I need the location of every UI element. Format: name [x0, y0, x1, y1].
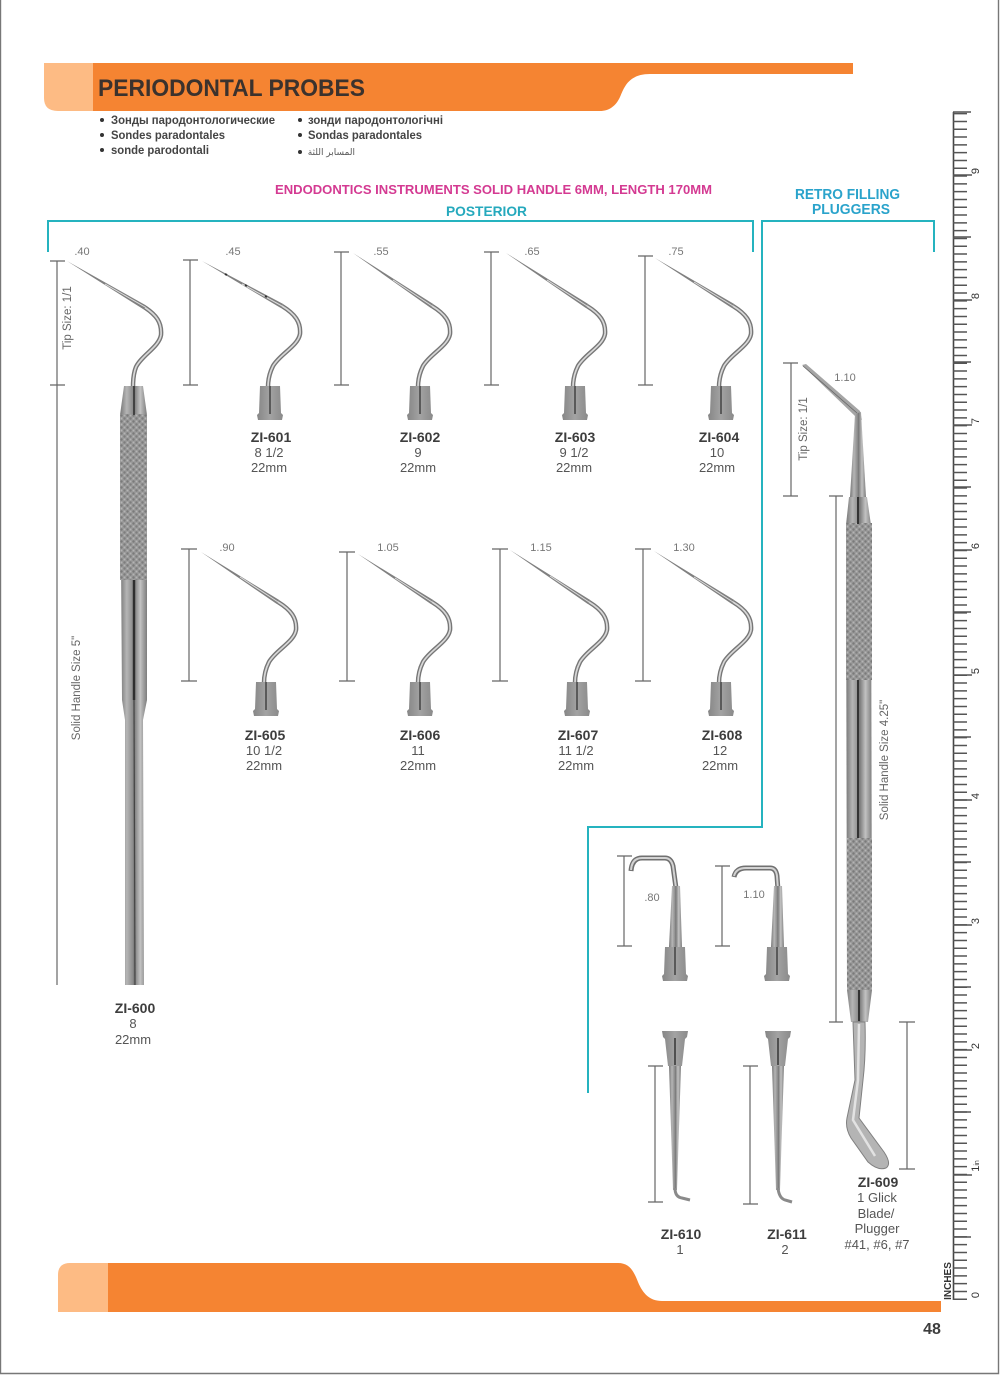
- label: ZI-606: 22mm: [400, 758, 436, 773]
- label: ZI-604: 10: [710, 445, 724, 460]
- instrument: ZI-610 upper: [631, 858, 688, 981]
- dimension: ZI-605: [181, 542, 235, 681]
- label: ZI-608: [702, 727, 742, 773]
- label: ZI-600: 22mm: [115, 1032, 151, 1047]
- multilingual names list: [100, 113, 443, 158]
- inch ruler: 2: [970, 1043, 982, 1049]
- label: ZI-601: 8 1/2: [255, 445, 283, 460]
- header banner: [44, 63, 853, 111]
- instrument: ZI-602: [353, 253, 450, 420]
- bracket: posterior: [48, 221, 753, 252]
- multilingual names list: зонди пародонтологічні: [308, 113, 443, 127]
- label: ZI-602: 22mm: [400, 460, 436, 475]
- label: ZI-603: 22mm: [556, 460, 592, 475]
- inch ruler: [943, 112, 982, 1300]
- dimension: ZI-606: [339, 542, 399, 681]
- instrument: ZI-604: [655, 258, 751, 420]
- inch ruler: 8: [970, 293, 982, 299]
- label: ZI-610: 1: [676, 1242, 684, 1257]
- dimension: ZI-610 upper: .80: [644, 892, 660, 904]
- label: ZI-601: [251, 429, 291, 475]
- label: ZI-603: ZI-603: [555, 429, 595, 445]
- bracket: retro filling pluggers: [588, 221, 934, 1093]
- label: ZI-609: 1 Glick: [857, 1190, 897, 1205]
- page number: 48: [923, 1321, 941, 1338]
- label: ZI-600: [115, 1000, 155, 1047]
- label: ZI-602: [400, 429, 440, 475]
- inch ruler: 3: [970, 918, 982, 924]
- dimension: ZI-603: [484, 246, 540, 385]
- label: ZI-611: ZI-611: [767, 1226, 807, 1242]
- dimension: ZI-604: [638, 246, 684, 385]
- label: ZI-607: 11 1/2: [558, 743, 594, 758]
- heading: posterior: POSTERIOR: [446, 203, 527, 219]
- label: ZI-606: ZI-606: [400, 727, 440, 743]
- instrument: ZI-600: [67, 261, 161, 985]
- dimension: ZI-609: [783, 363, 915, 1169]
- label: ZI-602: ZI-602: [400, 429, 440, 445]
- instrument: ZI-601: [202, 261, 300, 420]
- heading: retro filling pluggers: [795, 187, 900, 218]
- label: ZI-602: 9: [414, 445, 422, 460]
- title: PERIODONTAL PROBES: [98, 75, 365, 102]
- label: ZI-604: ZI-604: [699, 429, 739, 445]
- label: ZI-610: [661, 1226, 701, 1257]
- multilingual names list: المسابر اللثة: [308, 148, 355, 158]
- label: ZI-600: 8: [129, 1016, 137, 1031]
- dimension: ZI-600: [50, 246, 90, 985]
- label: ZI-604: [699, 429, 739, 475]
- dimension: ZI-605: .90: [219, 542, 235, 554]
- instrument: ZI-606: [358, 554, 450, 716]
- dimension: ZI-607: 1.15: [530, 542, 552, 554]
- label: ZI-611: [767, 1226, 807, 1257]
- instrument: ZI-603: [506, 253, 605, 420]
- dimension: ZI-600: Solid Handle Size 5": [71, 636, 83, 740]
- multilingual names list: Sondes paradontales: [111, 128, 225, 142]
- dimension: ZI-601: .45: [225, 246, 241, 258]
- heading: retro filling pluggers: RETRO FILLING: [795, 187, 900, 203]
- dimension: ZI-604: .75: [668, 246, 684, 258]
- label: ZI-611: 2: [781, 1242, 789, 1257]
- dimension: ZI-601: [183, 246, 241, 385]
- dimension: ZI-608: 1.30: [673, 542, 695, 554]
- label: ZI-608: 12: [713, 743, 727, 758]
- label: ZI-609: Blade/: [858, 1206, 895, 1221]
- inch ruler: 5: [970, 668, 982, 674]
- dimension: ZI-611 upper: 1.10: [743, 889, 765, 901]
- dimension: ZI-611 upper: [715, 866, 765, 946]
- inch ruler: 4: [970, 793, 982, 799]
- label: ZI-609: Plugger: [855, 1221, 900, 1236]
- label: ZI-605: 22mm: [246, 758, 282, 773]
- inch ruler: INCHES: [943, 1262, 954, 1300]
- dimension: ZI-609: Solid Handle Size 4.25": [879, 700, 891, 820]
- dimension: ZI-606: 1.05: [377, 542, 399, 554]
- label: ZI-606: 11: [411, 743, 425, 758]
- label: ZI-610: ZI-610: [661, 1226, 701, 1242]
- label: ZI-603: [555, 429, 595, 475]
- label: ZI-604: 22mm: [699, 460, 735, 475]
- multilingual names list: sonde parodontali: [111, 143, 209, 157]
- label: ZI-609: #41, #6, #7: [844, 1237, 910, 1252]
- dimension: ZI-608: [635, 542, 695, 681]
- label: ZI-601: 22mm: [251, 460, 287, 475]
- instrument: ZI-605: [201, 552, 296, 716]
- instrument: ZI-607: [510, 550, 607, 716]
- label: ZI-608: ZI-608: [702, 727, 742, 743]
- label: ZI-605: [245, 727, 285, 773]
- inch ruler: 9: [970, 168, 982, 174]
- dimension: ZI-610 upper: [617, 856, 660, 946]
- heading: retro filling pluggers: PLUGGERS: [812, 202, 890, 218]
- multilingual names list: Sondas paradontales: [308, 128, 422, 142]
- instrument: ZI-610 lower: [662, 1031, 690, 1200]
- footer banner: [58, 1263, 941, 1312]
- dimension: ZI-600: .40: [74, 246, 90, 258]
- label: ZI-609: [844, 1174, 910, 1252]
- instrument: ZI-608: [654, 551, 751, 716]
- dimension: ZI-611 lower: [743, 1066, 758, 1204]
- label: ZI-606: [400, 727, 440, 773]
- dimension: ZI-610 lower: [648, 1066, 663, 1202]
- dimension: ZI-602: .55: [373, 246, 389, 258]
- dimension: ZI-609: Tip Size: 1/1: [798, 397, 810, 461]
- inch ruler: 7: [970, 418, 982, 424]
- dimension: ZI-600: Tip Size: 1/1: [62, 286, 74, 350]
- dimension: ZI-602: [334, 246, 389, 385]
- instrument: ZI-611 lower: [765, 1031, 792, 1202]
- inch ruler: 1in: [970, 1160, 982, 1172]
- label: ZI-600: ZI-600: [115, 1000, 155, 1016]
- label: ZI-607: [558, 727, 598, 773]
- dimension: ZI-607: [492, 542, 552, 681]
- dimension: ZI-609: 1.10: [834, 372, 856, 384]
- label: ZI-601: ZI-601: [251, 429, 291, 445]
- label: ZI-607: 22mm: [558, 758, 594, 773]
- label: ZI-608: 22mm: [702, 758, 738, 773]
- label: ZI-609: ZI-609: [858, 1174, 898, 1190]
- label: ZI-603: 9 1/2: [560, 445, 588, 460]
- inch ruler: 6: [970, 543, 982, 549]
- label: ZI-605: 10 1/2: [246, 743, 282, 758]
- dimension: ZI-603: .65: [524, 246, 540, 258]
- inch ruler: 0: [970, 1292, 982, 1298]
- instrument: ZI-611 upper: [734, 868, 790, 981]
- subtitle: instruments: ENDODONTICS INSTRUMENTS SOLID HANDLE 6MM, LENGTH 170MM: [275, 183, 712, 197]
- multilingual names list: Зонды пародонтологические: [111, 113, 275, 127]
- label: ZI-607: ZI-607: [558, 727, 598, 743]
- instrument: ZI-609: [802, 364, 889, 1169]
- label: ZI-605: ZI-605: [245, 727, 285, 743]
